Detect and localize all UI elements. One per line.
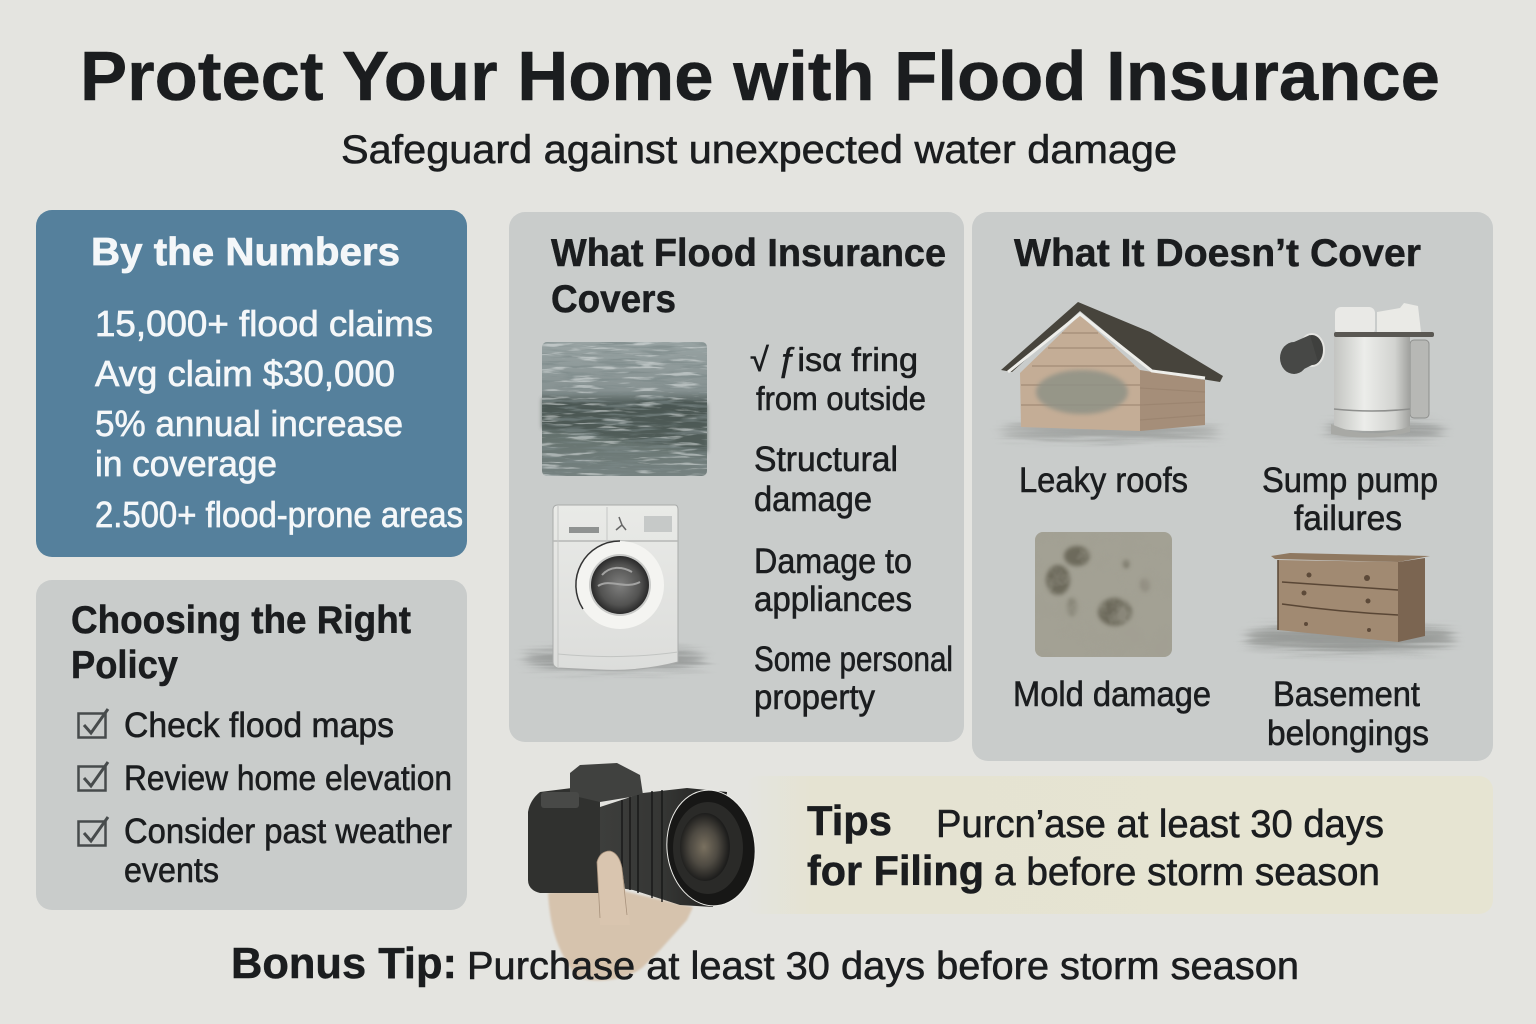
coverage item: structural damage: Structural — [754, 440, 898, 479]
checklist item: consider past weather events — [78, 812, 452, 890]
label: leaky roofs: Leaky roofs — [1019, 461, 1188, 500]
image: basement dresser — [1245, 553, 1455, 652]
label: basement belongings: Basement — [1273, 675, 1420, 714]
panel: by the numbers — [36, 210, 467, 557]
checklist item: consider past weather events: Consider past weather — [124, 812, 452, 851]
image: sump pump — [1280, 303, 1445, 438]
label: basement belongings: belongings — [1267, 714, 1429, 753]
coverage item: structural damage — [754, 440, 898, 519]
coverage item: some personal property: property — [754, 678, 875, 717]
heading: by the numbers: By the Numbers — [91, 231, 400, 274]
image: hand holding camera — [528, 763, 761, 980]
label: sump pump failures: Sump pump — [1262, 461, 1438, 500]
tips heading line one: Tips — [807, 797, 892, 844]
checklist item: review home elevation: Review home elevation — [124, 759, 452, 798]
heading: what flood insurance covers: What Flood Insurance — [551, 232, 946, 275]
bonus tip: Purchase at least 30 days before storm season — [467, 945, 1299, 988]
label: basement belongings — [1267, 675, 1429, 753]
tips text line one: Purcn’ase at least 30 days — [936, 803, 1384, 846]
panel: tips for filing — [745, 776, 1493, 914]
coverage item: structural damage: damage — [754, 480, 872, 519]
coverage item: seepage from outside — [750, 341, 926, 417]
label: sump pump failures — [1262, 461, 1438, 538]
label: mold damage: Mold damage — [1013, 675, 1211, 714]
heading: what flood insurance covers — [551, 232, 946, 321]
stat: annual increase — [95, 403, 403, 484]
coverage item: some personal property — [754, 640, 953, 717]
title: Protect Your Home with Flood Insurance — [80, 37, 1440, 115]
heading: choosing the right policy: Policy — [71, 644, 178, 687]
image: mold patch — [1035, 532, 1172, 657]
stat: flood-prone areas: 2.500+ flood-prone areas — [95, 494, 463, 535]
coverage item: seepage from outside: from outside — [756, 380, 926, 417]
subtitle: Safeguard against unexpected water damage — [341, 128, 1177, 172]
stat: annual increase: in coverage — [95, 443, 277, 484]
image: leaky roof house — [1000, 302, 1223, 439]
stat: annual increase: 5% annual increase — [95, 403, 403, 444]
image: flood water — [542, 342, 707, 476]
panel: what it doesn't cover — [972, 212, 1493, 761]
checklist item: check flood maps: Check flood maps — [124, 706, 394, 745]
image: washing machine — [523, 505, 707, 670]
panel: what flood insurance covers — [509, 212, 964, 742]
heading: choosing the right policy: Choosing the Right — [71, 599, 411, 642]
stat: flood claims: 15,000+ flood claims — [95, 303, 433, 344]
tips heading line two: for Filing — [807, 847, 984, 894]
heading: choosing the right policy — [71, 599, 411, 687]
coverage item: some personal property: Some personal — [754, 640, 953, 679]
checklist item: consider past weather events: events — [124, 851, 219, 890]
bonus tip — [231, 939, 1299, 988]
coverage item: seepage from outside: √ ƒisα fring — [750, 341, 918, 378]
coverage item: damage to appliances: appliances — [754, 580, 912, 619]
coverage item: damage to appliances: Damage to — [754, 542, 912, 581]
bonus tip: Bonus Tip: — [231, 939, 457, 988]
label: sump pump failures: failures — [1294, 499, 1402, 538]
heading: what flood insurance covers: Covers — [551, 278, 676, 321]
stat: average claim: Avg claim $30,000 — [95, 353, 395, 394]
tips text line two: a before storm season — [994, 851, 1380, 894]
heading: what it doesn't cover: What It Doesn’t Cover — [1014, 232, 1421, 275]
panel: choosing the right policy — [36, 580, 467, 910]
coverage item: damage to appliances — [754, 542, 912, 619]
